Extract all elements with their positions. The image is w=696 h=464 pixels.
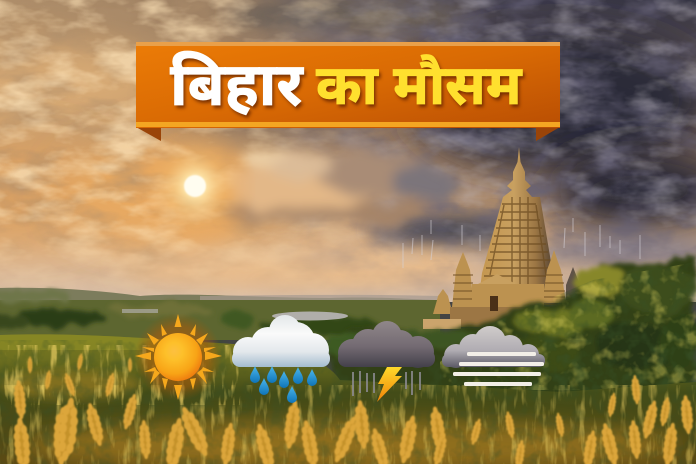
river (272, 312, 348, 320)
temple side towers (433, 250, 566, 314)
lightning bolt (377, 367, 402, 402)
icon: fog cloud (442, 326, 545, 386)
temple main tower (478, 147, 558, 305)
title (170, 50, 526, 120)
wheat field (0, 334, 696, 464)
temple tower texture (484, 197, 553, 300)
sun glow (133, 124, 257, 248)
rain streaks (403, 218, 640, 268)
tree line (0, 290, 440, 340)
title: का मौसम (316, 54, 522, 116)
banner ribbon folds (136, 127, 560, 141)
sky (0, 0, 696, 302)
temple (423, 147, 580, 329)
icon: storm cloud (338, 321, 435, 402)
icon: rain cloud (232, 315, 330, 403)
wheat ears (12, 353, 694, 464)
title: बिहार (170, 51, 303, 118)
temple back tower (566, 267, 580, 300)
distant hills (0, 288, 440, 320)
banner (136, 42, 560, 128)
trees on right (326, 252, 696, 392)
cumulus clouds (220, 148, 457, 224)
temple base (472, 284, 544, 312)
icon: sun (134, 313, 222, 401)
